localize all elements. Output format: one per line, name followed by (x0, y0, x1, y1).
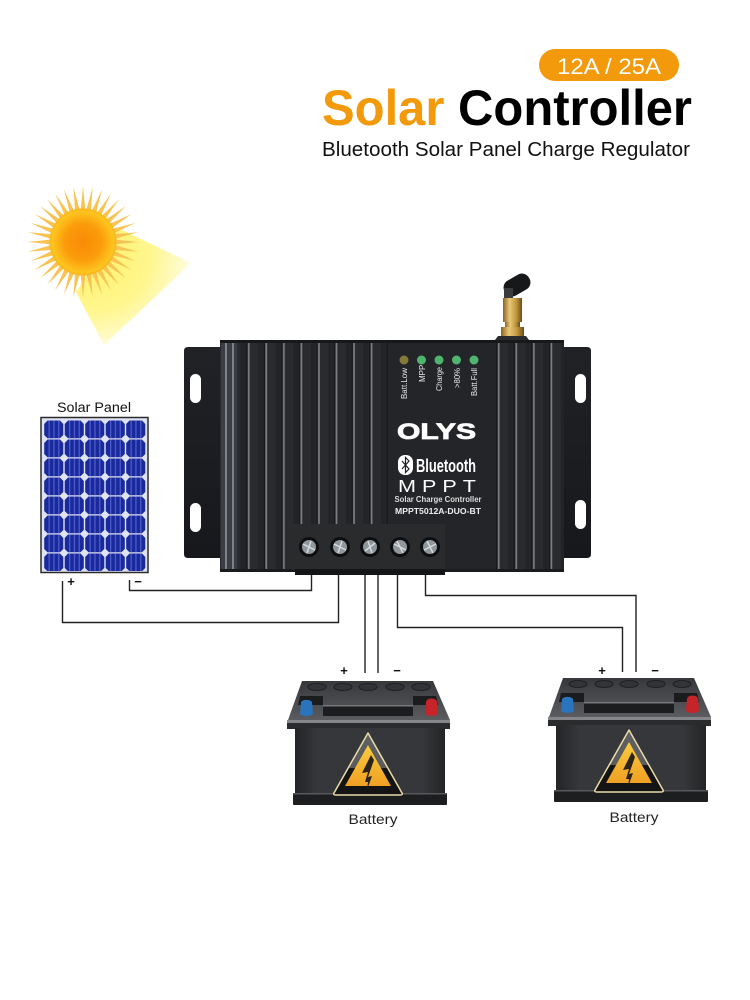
status LEDs (400, 356, 478, 364)
LED labels: >80% (453, 368, 462, 388)
ribbed body (220, 340, 564, 572)
LED labels (400, 365, 479, 399)
model: MPPT5012A-DUO-BT (395, 507, 481, 516)
mounting holes (190, 374, 586, 532)
solar panel label: Solar Panel (57, 400, 131, 415)
battery 1 label: Battery (348, 811, 398, 827)
subtitle: Bluetooth Solar Panel Charge Regulator (322, 139, 690, 161)
brand: OLYS (397, 419, 476, 444)
bluetooth icon (398, 455, 413, 475)
centre label plate (388, 343, 494, 569)
battery 1 plus sign: + (340, 663, 348, 678)
icon: sun with light beam (27, 186, 191, 345)
terminal block (292, 524, 445, 575)
panel minus sign: − (134, 574, 142, 589)
battery 2 label: Battery (610, 809, 658, 825)
terminal screws (299, 537, 440, 557)
product line: Solar Charge Controller (394, 495, 482, 504)
battery 2 (548, 678, 711, 802)
battery 1 (287, 681, 450, 805)
LED labels: Batt.Full (470, 368, 479, 396)
bluetooth wordmark: Bluetooth (416, 456, 476, 476)
solar panel (41, 418, 148, 572)
wiring (62, 575, 636, 673)
panel plus sign: + (67, 574, 75, 589)
LED labels: MPP (418, 365, 427, 382)
title: Solar Controller (322, 80, 692, 136)
badge: 12A / 25A: 12A / 25A (557, 54, 661, 79)
badge: 12A / 25A (539, 49, 679, 81)
battery 2 plus sign: + (598, 663, 606, 678)
mounting flanges (184, 347, 225, 558)
MPPT: MPPT (398, 477, 476, 497)
battery 1 minus sign: − (393, 663, 401, 678)
LED labels: Charge (435, 367, 444, 391)
antenna (495, 271, 533, 340)
battery 2 minus sign: − (651, 663, 659, 678)
controller (184, 340, 591, 575)
LED labels: Batt.Low (400, 368, 409, 399)
